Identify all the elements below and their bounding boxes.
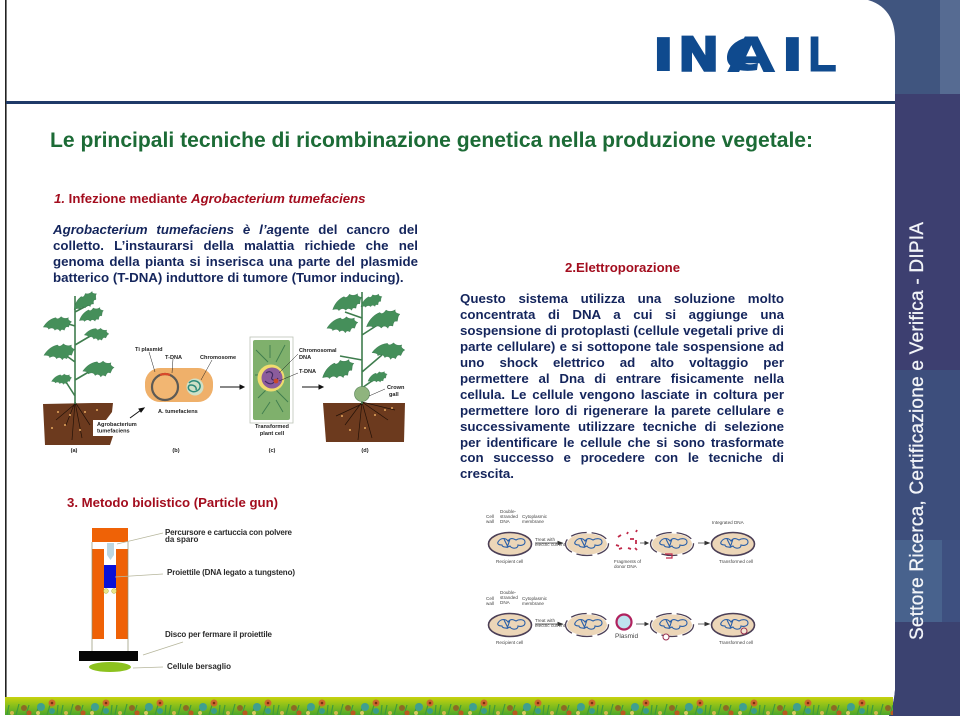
gun labels: Cellule bersaglio [167,662,231,671]
step letters: (b) [172,448,180,454]
text block: electroporation [460,291,784,481]
labels: bacterium: Ti plasmid [135,347,163,353]
text block: Agrobacterium: colletto. L’instaurarsi della malattia richiede che nel [53,238,418,253]
text block: electroporation: parte cellulare) e si sottopone tale sospensione ad [460,339,784,354]
labels: plant cell: plant cell [260,431,285,437]
logo: INAIL: I [780,27,805,82]
label: crown gall: Crown [387,385,405,391]
row 1: DNA fragments: stranded [500,514,518,519]
gun labels: Percursore e cartuccia con polvere [165,528,293,537]
row 2: plasmid: Cytoplasmic [522,596,548,601]
plant a [43,289,115,445]
gun labels: Disco per fermare il proiettile [165,630,273,639]
heading: section 2: 2.Elettroporazione [565,260,680,275]
row 2: plasmid: Cell [486,596,494,601]
row 2: plasmid: Treat with [535,618,555,623]
text block: electroporation: concentrata di DNA a cui si aggiunge una [460,307,784,322]
row 2: plasmid: Recipient cell [496,640,523,645]
row 1: DNA fragments: Integrated DNA [712,520,745,525]
row 1: DNA fragments: Fragments of [614,559,642,564]
logo: INAIL [651,27,837,82]
labels: bacterium [135,347,236,415]
text block: electroporation: con successo e procedere con le tecniche di [460,450,784,465]
plant d [320,292,406,442]
gun labels [165,528,295,671]
logo: INAIL: L [808,27,837,82]
grass footer band [5,697,893,715]
text block: electroporation: cellula. Le cellule vengono lasciate in coltura per [460,386,784,402]
text block: Agrobacterium: genoma della pianta si inserisca una parte del plasmide [53,254,418,268]
text block: electroporation: crescita. [460,466,514,481]
label: crown gall: gall [389,392,399,398]
gun labels: da sparo [165,535,198,544]
title: Le principali tecniche di ricombinazione genetica nella produzione vegetale: [50,129,813,152]
row 1: DNA fragments: Double- [500,509,517,514]
diagram: particle gun [79,528,295,672]
arrow to plant d [302,385,323,389]
labels: plant cell: Chromosomal [299,348,337,354]
step letters: (d) [361,448,369,454]
labels: bacterium: T-DNA [165,355,182,361]
row 1: DNA fragments: Recipient cell [496,559,523,564]
row 2: plasmid: membrane [522,601,544,606]
gun labels: Proiettile (DNA legato a tungsteno) [167,568,295,577]
label: Agrobacterium: Agrobacterium [97,422,137,428]
diagram: Agrobacterium infection [43,289,406,454]
text block: electroporation: permettere loro di rigenerare la parete cellulare e [460,402,784,418]
logo: INAIL: I [651,27,676,82]
row 1: DNA fragments: DNA [500,519,511,524]
plant cell c [250,337,298,423]
labels: plant cell [255,348,337,437]
labels: bacterium: A. tumefaciens [158,409,198,415]
text block: Agrobacterium: Agrobacterium tumefaciens è l’agente del cancro del [53,222,418,237]
row 2: plasmid: electric current [535,623,566,628]
step letters: (a) [71,448,78,454]
diagram: Agrobacterium infection: tumefaciens [97,428,130,434]
row 2: plasmid [486,590,754,645]
row 1: DNA fragments: Transformed cell [719,559,753,564]
text block: electroporation: Questo sistema utilizza una soluzione molto [460,291,784,306]
labels: plant cell: DNA [299,355,311,361]
row 1: DNA fragments: membrane [522,519,544,524]
labels: plant cell: T-DNA [299,369,316,375]
text block: electroporation: successivamente utilizzare tecniche di selezione [460,418,784,434]
text block: electroporation: sospensione di protoplasti (cellule vegetali prive di [460,323,784,338]
bacterium cell b [145,352,213,402]
row 1: DNA fragments: electric current [535,542,566,547]
row 1: DNA fragments: Cytoplasmic [522,514,548,519]
labels: bacterium: Chromosome [200,355,236,361]
row 2: plasmid: stranded [500,595,518,600]
label: crown gall [387,385,405,398]
row 2: plasmid: Transformed cell [719,640,753,645]
text block: Agrobacterium: batterico (T-DNA) induttore di tumore (Tumor inducing). [53,270,404,284]
arrow to bacterium [130,408,144,418]
text block: electroporation: permettere al Dna di entrare fisicamente nella [460,371,784,386]
text block: electroporation: per identificare le cellule che si sono trasformate [460,434,784,450]
arrow to plant cell [220,385,244,389]
row 2: plasmid: wall [486,601,494,606]
sidebar label: Settore Ricerca, Certificazione e Verifica - DIPIA [907,222,928,640]
sidebar panel [868,0,960,716]
row 1: DNA fragments: donor DNA [614,564,638,569]
heading: section 3: 3. Metodo biolistico (Particle gun) [67,495,278,510]
diagram: electroporation [486,509,754,645]
logo: INAIL: N [680,28,717,80]
heading: section 1: 1. Infezione mediante Agrobacterium tumefaciens [54,191,365,206]
row 1: DNA fragments: Cell [486,514,494,519]
row 1: DNA fragments: wall [486,519,494,524]
text block: electroporation: uno shock elettrico ad alto voltaggio per [460,355,784,370]
text block: Agrobacterium [52,222,418,284]
row 1: DNA fragments: Treat with [535,537,555,542]
row 2: plasmid: DNA [500,600,511,605]
row 1: DNA fragments [486,509,754,569]
labels: plant cell: Transformed [255,424,290,430]
logo: INAIL: A [727,27,776,82]
row 2: plasmid: Double- [500,590,517,595]
row 2: plasmid: Plasmid [615,633,639,640]
step letters [71,448,369,454]
step letters: (c) [269,448,276,454]
